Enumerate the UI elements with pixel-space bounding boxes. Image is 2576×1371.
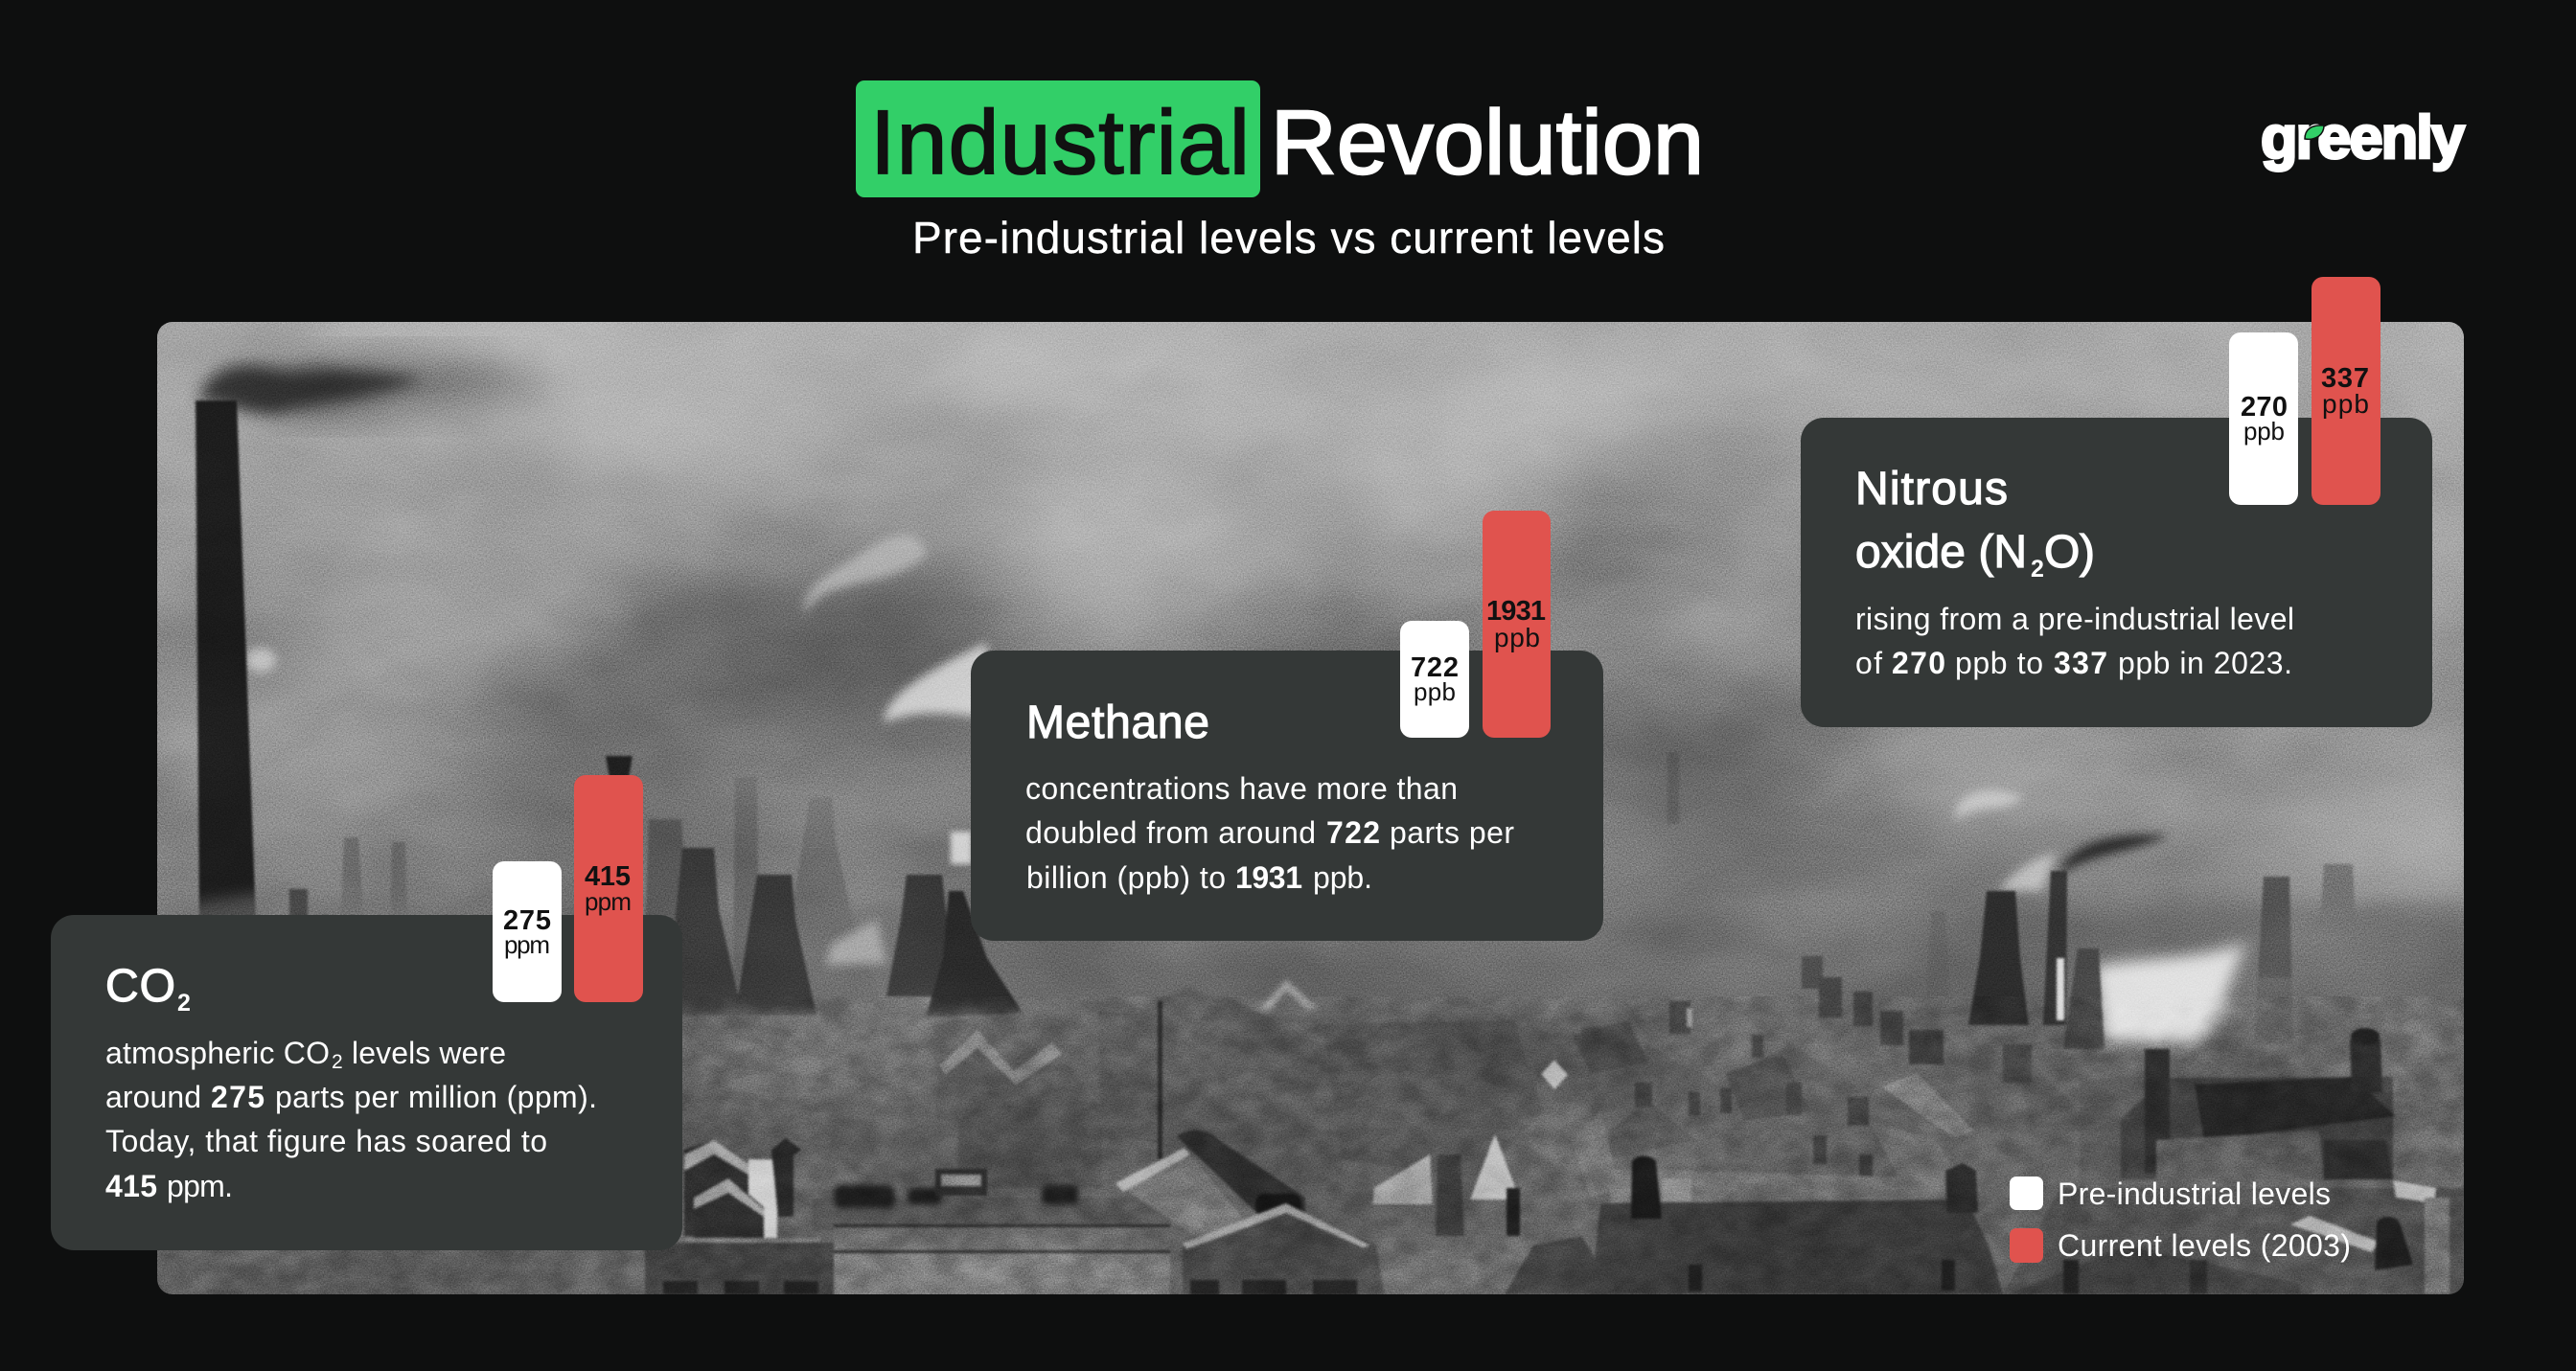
CO2 description: 415 <box>105 1169 157 1203</box>
sky base <box>157 322 2464 1294</box>
bar: CO2 current 415 ppm: 415 <box>585 861 631 892</box>
Methane description: doubled from around <box>1025 815 1316 850</box>
distant skyline band <box>167 887 2464 989</box>
Nitrous oxide heading: oxide (N <box>1855 527 2027 578</box>
bar: CO2 pre-industrial 275 ppm: 275 <box>503 905 551 936</box>
legend label: current: Current levels (2003) <box>2058 1228 2351 1263</box>
far roofs mid <box>157 1014 2464 1298</box>
Nitrous oxide description: of <box>1855 646 1882 680</box>
bar: Methane pre-industrial 722 ppb <box>1400 621 1469 738</box>
bright haze between kilns <box>826 920 886 965</box>
Nitrous oxide description: 337 <box>2054 646 2107 680</box>
Nitrous oxide card background <box>1801 418 2432 727</box>
Nitrous oxide description: ppb in 2023. <box>2118 646 2292 680</box>
Methane description: concentrations have more than <box>1025 771 1458 806</box>
legend label: pre-industrial: Pre-industrial levels <box>2058 1177 2331 1211</box>
film mottling <box>157 322 2464 1294</box>
CO2 description: around <box>105 1080 201 1114</box>
Methane description: parts per <box>1390 815 1514 850</box>
bar: N2O current 337 ppb: ppb <box>2322 389 2369 419</box>
far chimneys left <box>289 756 632 929</box>
mid-ground roof gables <box>700 996 1629 1294</box>
white smoke behind kilns <box>2094 944 2247 1044</box>
title highlight box <box>856 80 1260 197</box>
CO2 description: 275 <box>211 1080 264 1114</box>
bar: N2O pre-industrial 270 ppb: 270 <box>2241 392 2288 423</box>
title word: Industrial: Industrial <box>870 92 1250 194</box>
icon: leaf <box>2305 126 2324 139</box>
Nitrous oxide heading: O) <box>2044 527 2095 578</box>
CO2 description: levels were <box>352 1036 506 1070</box>
CO2 description <box>105 1036 597 1203</box>
Methane description <box>1025 771 1514 895</box>
Methane description: 722 <box>1326 815 1380 850</box>
Nitrous oxide description <box>1855 602 2294 680</box>
film grain <box>157 322 2464 1294</box>
smoke and cloud masses <box>195 322 2464 923</box>
Methane description: ppb. <box>1313 860 1372 895</box>
subtitle: Pre-industrial levels vs current levels <box>912 213 1665 263</box>
CO2 description: atmospheric CO <box>105 1036 330 1070</box>
bar: CO2 pre-industrial 275 ppm: ppm <box>504 930 550 959</box>
Methane card background <box>971 651 1603 941</box>
title word: Revolution: Revolution <box>1271 92 1704 194</box>
legend swatch: pre-industrial <box>2010 1177 2043 1210</box>
rooftop texture <box>157 996 2464 1294</box>
panel: Nitrous oxide <box>1801 277 2432 727</box>
foreground buildings centre-left <box>645 1131 1384 1300</box>
bar: Methane pre-industrial 722 ppb: ppb <box>1414 677 1456 706</box>
title <box>856 80 1704 197</box>
Nitrous oxide description: rising from a pre-industrial level <box>1855 602 2294 636</box>
bar: CO2 current 415 ppm <box>574 775 643 1002</box>
Methane heading: Methane <box>1026 697 1209 748</box>
legend <box>2010 1177 2351 1263</box>
Nitrous oxide description: ppb to <box>1955 646 2043 680</box>
tall chimney <box>196 400 256 920</box>
bottle kilns left <box>642 777 1024 1035</box>
bar: Methane current 1931 ppb: ppb <box>1494 623 1540 652</box>
Nitrous oxide heading: 2 <box>2031 556 2044 583</box>
bar: CO2 pre-industrial 275 ppm <box>493 861 562 1002</box>
CO2 card background <box>51 915 682 1250</box>
rooftops and chimney pots right of centre <box>1572 956 2464 1294</box>
CO2 description: Today, that figure has soared to <box>105 1124 547 1158</box>
bar: N2O pre-industrial 270 ppb: ppb <box>2243 417 2285 446</box>
legend swatch: current <box>2010 1228 2043 1263</box>
distant kilns and chimneys right <box>1668 752 2364 1049</box>
dark smoke from right chimney <box>2060 834 2168 874</box>
Nitrous oxide heading <box>1855 464 2095 583</box>
panel: CO2 <box>51 775 682 1250</box>
Methane description: billion (ppb) to <box>1026 860 1226 895</box>
Nitrous oxide description: 270 <box>1892 646 1945 680</box>
CO2 heading: 2 <box>177 990 191 1017</box>
CO2 description: parts per million (ppm). <box>275 1080 597 1114</box>
Methane description: 1931 <box>1235 860 1302 895</box>
panel: Methane <box>971 511 1603 941</box>
bar: CO2 current 415 ppm: ppm <box>585 887 632 916</box>
logo: greenly: greenly <box>2261 104 2465 171</box>
bar: Methane pre-industrial 722 ppb: 722 <box>1411 652 1459 683</box>
bar: Methane current 1931 ppb: 1931 <box>1486 596 1546 627</box>
Nitrous oxide heading: Nitrous <box>1855 464 2008 514</box>
bar: N2O current 337 ppb <box>2312 277 2380 505</box>
bar: N2O pre-industrial 270 ppb <box>2229 332 2298 505</box>
smoke plume from tall chimney <box>197 361 556 414</box>
CO2 description: 2 <box>332 1051 343 1073</box>
CO2 description: ppm. <box>167 1169 233 1203</box>
CO2 heading: CO <box>105 961 175 1012</box>
photo: smoky industrial town <box>157 316 2549 1300</box>
bar: N2O current 337 ppb: 337 <box>2321 363 2369 394</box>
white smoke wisps <box>245 536 2024 864</box>
bar: Methane current 1931 ppb <box>1483 511 1551 738</box>
